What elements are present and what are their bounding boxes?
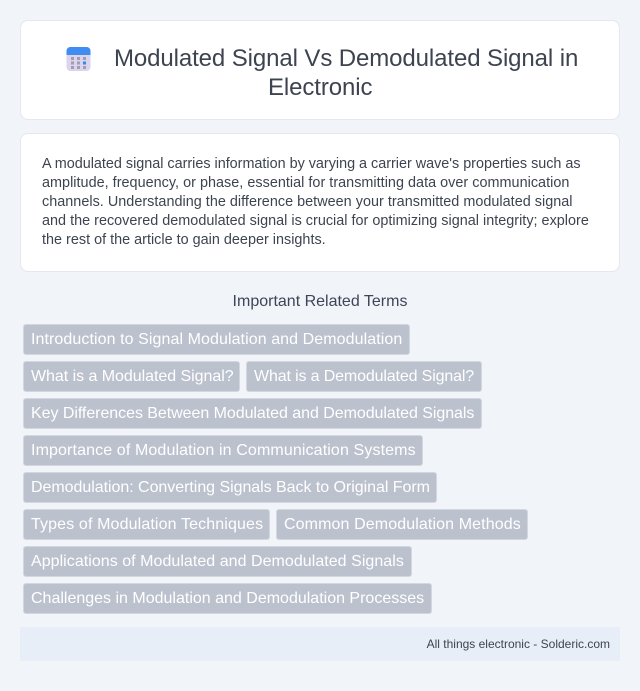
tag: Common Demodulation Methods — [284, 516, 521, 533]
tag — [23, 509, 270, 540]
tag — [23, 546, 412, 577]
tag: Demodulation: Converting Signals Back to Original Form — [31, 479, 430, 496]
tag: Introduction to Signal Modulation and Demodulation — [31, 331, 402, 348]
panel: related term tags — [23, 324, 528, 614]
text block: summary: channels. Understanding the difference between your transmitted modulated signal — [42, 194, 573, 210]
tag — [246, 361, 482, 392]
tag — [276, 509, 528, 540]
text block: summary: amplitude, frequency, or phase, essential for transmitting data over communication — [42, 175, 569, 191]
tag: Importance of Modulation in Communication Systems — [31, 442, 416, 459]
tag — [23, 361, 240, 392]
tag: Key Differences Between Modulated and Demodulated Signals — [31, 405, 474, 422]
tag — [23, 435, 423, 466]
footer — [20, 627, 620, 661]
tag — [23, 472, 437, 503]
title — [114, 45, 578, 101]
text block: summary: the rest of the article to gain deeper insights. — [42, 232, 326, 248]
tag — [23, 324, 410, 355]
tag: Challenges in Modulation and Demodulation Processes — [31, 590, 424, 607]
title: Modulated Signal Vs Demodulated Signal in — [114, 45, 578, 72]
text block: summary — [42, 156, 589, 248]
panel: summary text — [20, 133, 620, 272]
tag: What is a Modulated Signal? — [31, 368, 234, 385]
footer text: All things electronic - Solderic.com — [427, 637, 610, 651]
tag — [23, 583, 432, 614]
title: Electronic — [268, 74, 372, 101]
heading: important related terms: Important Related Terms — [233, 293, 407, 310]
icon: calendar — [66, 47, 90, 71]
text block: summary: A modulated signal carries information by varying a carrier wave's properties such as — [42, 156, 581, 172]
tag: Applications of Modulated and Demodulated Signals — [31, 553, 404, 570]
text block: summary: and the recovered demodulated signal is crucial for optimizing signal integrity; explore — [42, 213, 589, 229]
tag: Types of Modulation Techniques — [31, 516, 263, 533]
panel: title card — [20, 20, 620, 120]
tag: What is a Demodulated Signal? — [254, 368, 474, 385]
tag — [23, 398, 482, 429]
